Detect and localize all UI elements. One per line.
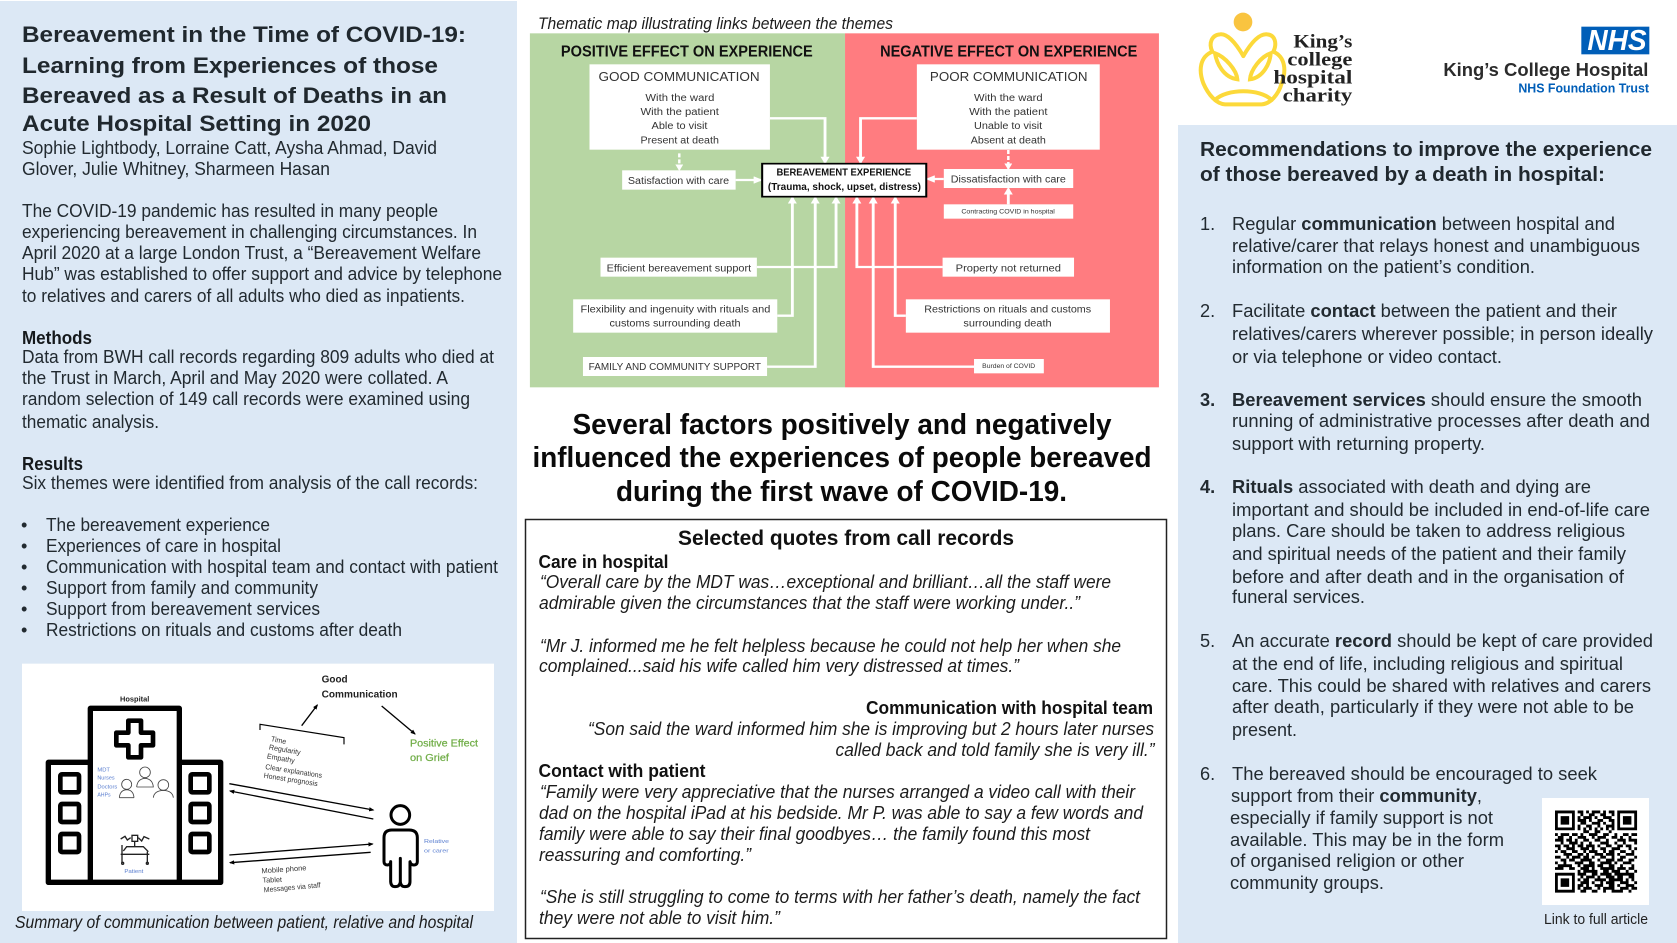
logo: nhs trust: NHS Foundation Trust [1518, 81, 1650, 95]
quotes: care in hospital: Care in hospital [538, 552, 668, 572]
recommendation 2: Facilitate contact between the patient and their [1232, 301, 1617, 321]
relative label: or carer [424, 849, 449, 855]
bracket with communication qualities: Regularity [268, 742, 302, 757]
results heading: Results [22, 454, 83, 474]
quotes: communication with hospital team: called back and told family she is very ill.” [836, 740, 1155, 760]
recommendation 6: The bereaved should be encouraged to seek [1232, 764, 1598, 784]
recommendation 2: or via telephone or video contact. [1232, 347, 1502, 367]
box: good communication: GOOD COMMUNICATION [598, 70, 760, 85]
staff labels: Doctors [97, 784, 117, 790]
box: poor communication: Unable to visit [974, 121, 1043, 132]
box: flexibility: customs surrounding death [609, 318, 741, 329]
box: efficient bereavement support [601, 258, 757, 277]
title: Bereavement in the Time of COVID-19: [22, 22, 466, 47]
box: good communication: With the patient [641, 107, 720, 118]
thematic map caption: Thematic map illustrating links between the themes [538, 15, 893, 33]
staff labels: AHPs [97, 792, 111, 798]
quotes: contact with patient: Contact with patient [538, 761, 706, 781]
quotes: communication with hospital team: “Son said the ward informed him she is improving but 2 hours later nurses [588, 719, 1154, 739]
recommendation 1: relative/carer that relays honest and unambiguous [1232, 236, 1640, 256]
box: property not returned: Property not returned [956, 264, 1061, 274]
themes list: Communication with hospital team and contact with patient [46, 557, 498, 577]
recommendation 5: An accurate record should be kept of care provided [1232, 631, 1653, 651]
staff labels [97, 768, 117, 798]
quotes: communication with hospital team: Communication with hospital team [866, 698, 1153, 718]
methods text: thematic analysis. [22, 412, 159, 432]
bracket with communication qualities [260, 724, 344, 788]
box: poor communication: With the ward [974, 93, 1043, 104]
box: good communication: Able to visit [652, 121, 708, 132]
box: poor communication: POOR COMMUNICATION [930, 70, 1087, 85]
introduction text: The COVID-19 pandemic has resulted in many people [22, 201, 438, 221]
title: Bereaved as a Result of Deaths in an [22, 83, 447, 108]
good communication label: Communication [322, 689, 398, 700]
themes list: Support from family and community [46, 578, 319, 598]
bracket with communication qualities: Empathy [266, 751, 296, 765]
recommendation 3: Bereavement services should ensure the smooth [1232, 390, 1642, 410]
recommendation 3: 3. [1200, 390, 1215, 410]
icon: relative or carer [384, 806, 417, 887]
authors [22, 138, 437, 179]
themes list: • [21, 557, 27, 577]
quotes: contact with patient [538, 761, 1144, 928]
recommendation 2: relatives/carers wherever possible; in person ideally [1232, 324, 1654, 344]
recommendation 4: before and after death and in the organisation of [1232, 567, 1625, 587]
quotes: contact with patient: “Family were very appreciative that the nurses arranged a video call with their [540, 782, 1136, 802]
diagram caption: Summary of communication between patient, relative and hospital [15, 912, 474, 932]
recommendation 6: of organised religion or other [1230, 851, 1464, 871]
positive effect label [410, 738, 478, 764]
box: efficient bereavement support: Efficient bereavement support [607, 264, 752, 274]
central finding heading [532, 409, 1152, 508]
introduction text [22, 201, 502, 306]
relative label [424, 839, 449, 855]
arrows: links to bereavement experience [679, 118, 1008, 367]
recommendation 5 [1200, 631, 1653, 740]
quotes: care in hospital: complained...said his wife called him very distressed at times.” [539, 656, 1020, 676]
box: burden of covid [974, 359, 1044, 373]
icon: staff [119, 767, 173, 798]
arrows: upper two-way communication [229, 784, 373, 819]
themes list: The bereavement experience [46, 515, 270, 535]
themes list [21, 515, 498, 640]
positive effect label: Positive Effect [410, 738, 478, 749]
patient label: Patient [124, 869, 144, 875]
qr code [1542, 798, 1649, 905]
panel: study summary [0, 1, 517, 943]
recommendation 2: 2. [1200, 301, 1215, 321]
central finding heading: during the first wave of COVID-19. [616, 476, 1067, 508]
recommendation 4: and spiritual needs of the patient and their family [1232, 544, 1627, 564]
box: dissatisfaction with care: Dissatisfaction with care [951, 175, 1066, 185]
box: restrictions: surrounding death [963, 318, 1052, 329]
themes list: • [21, 536, 27, 556]
themes list: • [21, 599, 27, 619]
themes list: Support from bereavement services [46, 599, 320, 619]
themes list: • [21, 620, 27, 640]
quotes: contact with patient: family were able to say their final goodbyes… the family found this most [539, 824, 1091, 844]
quotes: care in hospital: admirable given the circumstances that the staff were working under..” [539, 593, 1081, 613]
positive effect label: on Grief [410, 753, 449, 764]
devices list [261, 863, 322, 894]
communication diagram [22, 664, 494, 911]
introduction text: April 2020 at a large London Trust, a “Bereavement Welfare [22, 243, 481, 263]
box: satisfaction with care [622, 170, 736, 190]
recommendation 6: 6. [1200, 764, 1215, 784]
panel: selected quotes [526, 520, 1166, 938]
recommendation 4: 4. [1200, 477, 1215, 497]
logo: king's college hospital charity: college [1287, 49, 1352, 70]
recommendation 2 [1200, 301, 1654, 367]
box: bereavement experience: BEREAVEMENT EXPERIENCE [776, 168, 911, 178]
box: bereavement experience [762, 164, 926, 197]
results text: Six themes were identified from analysis of the call records: [22, 473, 478, 493]
methods text: random selection of 149 call records were examined using [22, 389, 470, 409]
recommendation 4 [1200, 477, 1650, 607]
devices list: Tablet [262, 875, 282, 885]
recommendation 4: important and should be included in end-of-life care [1232, 500, 1650, 520]
themes list: • [21, 515, 27, 535]
box: restrictions [906, 299, 1110, 333]
title: Acute Hospital Setting in 2020 [22, 111, 371, 136]
authors: Glover, Julie Whitney, Sharmeen Hasan [22, 159, 330, 179]
panel: positive effect [530, 33, 845, 387]
methods text: Data from BWH call records regarding 809 adults who died at [22, 347, 494, 367]
icon: hospital building: Hospital [120, 695, 149, 704]
introduction text: to relatives and carers of all adults who died as inpatients. [22, 286, 465, 306]
good communication label [322, 674, 398, 700]
box: poor communication: Absent at death [971, 136, 1046, 146]
logo: nhs trust: NHS [1587, 25, 1647, 57]
box: family and community support: FAMILY AND COMMUNITY SUPPORT [589, 362, 761, 373]
arrow: to good communication [302, 705, 317, 726]
quotes: contact with patient: they were not able to visit him.” [539, 908, 781, 928]
heading: positive effect: POSITIVE EFFECT ON EXPERIENCE [561, 42, 813, 60]
introduction text: Hub” was established to offer support and advice by telephone [22, 264, 502, 284]
recommendation 5: 5. [1200, 631, 1215, 651]
recommendation 3: support with returning property. [1232, 434, 1485, 454]
methods text: the Trust in March, April and May 2020 were collated. A [22, 368, 449, 388]
title [22, 22, 466, 136]
panel: negative effect [845, 33, 1159, 387]
recommendation 4: funeral services. [1232, 587, 1365, 607]
themes list: • [21, 578, 27, 598]
recommendation 1: 1. [1200, 214, 1215, 234]
central finding heading: Several factors positively and negatively [572, 409, 1112, 441]
recommendation 4: Rituals associated with death and dying are [1232, 477, 1591, 497]
logo: nhs trust: King’s College Hospital [1443, 59, 1648, 80]
recommendation 3 [1200, 390, 1650, 454]
logo: king's college hospital charity: hospital [1273, 67, 1352, 88]
staff labels: MDT [97, 768, 111, 774]
recommendation 4: plans. Care should be taken to address religious [1232, 521, 1625, 541]
box: contracting covid [944, 204, 1073, 219]
title: Learning from Experiences of those [22, 53, 438, 78]
recommendation 1: Regular communication between hospital and [1232, 214, 1615, 234]
box: property not returned [943, 258, 1074, 277]
recommendations heading [1200, 138, 1652, 186]
relative label: Relative [424, 839, 449, 845]
themes list: Experiences of care in hospital [46, 536, 281, 556]
box: burden of covid: Burden of COVID [982, 364, 1035, 370]
recommendation 5: at the end of life, including religious and spiritual [1232, 654, 1623, 674]
panel: recommendations [1178, 125, 1677, 943]
box: poor communication [917, 64, 1100, 150]
quotes: contact with patient: reassuring and comforting.” [539, 845, 752, 865]
box: good communication: Present at death [641, 136, 719, 146]
bracket with communication qualities: Clear explanations [265, 762, 323, 780]
qr caption: Link to full article [1544, 911, 1648, 928]
quotes: care in hospital [538, 552, 1121, 676]
quotes: communication with hospital team [588, 698, 1155, 760]
recommendations heading: of those bereaved by a death in hospital: [1200, 163, 1605, 186]
recommendation 1: information on the patient’s condition. [1232, 257, 1535, 277]
recommendation 6 [1200, 764, 1598, 893]
arrow: to positive effect [382, 706, 415, 734]
good communication label: Good [322, 674, 348, 685]
arrows: lower two-way communication [229, 844, 373, 863]
logo: nhs trust [1443, 25, 1650, 95]
thematic map [530, 33, 1159, 387]
box: dissatisfaction with care [944, 169, 1073, 188]
box: good communication [589, 64, 770, 150]
quotes: care in hospital: “Mr J. informed me he felt helpless because he could not help her when she [540, 636, 1121, 656]
box: restrictions: Restrictions on rituals and customs [924, 304, 1092, 315]
recommendation 5: present. [1232, 720, 1297, 740]
bracket with communication qualities: Honest prognosis [263, 771, 319, 788]
recommendation 5: care. This could be shared with relatives and carers [1232, 676, 1651, 696]
quotes: contact with patient: “She is still struggling to come to terms with her father’s death, namely the fact [540, 887, 1141, 907]
recommendation 6: especially if family support is not [1230, 808, 1493, 828]
themes list: Restrictions on rituals and customs after death [46, 620, 402, 640]
methods heading: Methods [22, 328, 92, 348]
quotes heading: Selected quotes from call records [678, 527, 1014, 550]
authors: Sophie Lightbody, Lorraine Catt, Aysha Ahmad, David [22, 138, 437, 158]
recommendation 5: after death, particularly if they were not able to be [1232, 697, 1634, 717]
introduction text: experiencing bereavement in challenging circumstances. In [22, 222, 477, 242]
box: satisfaction with care: Satisfaction with care [628, 176, 729, 187]
recommendation 1 [1200, 214, 1640, 277]
logo: king's college hospital charity: King’s [1293, 32, 1352, 53]
icon: hospital building [48, 695, 221, 882]
devices list: Mobile phone [261, 863, 307, 875]
central finding heading: influenced the experiences of people bereaved [532, 442, 1152, 474]
methods text [22, 347, 494, 432]
box: contracting covid: Contracting COVID in hospital [961, 207, 1055, 215]
logo: king's college hospital charity [1201, 13, 1650, 107]
recommendation 3: running of administrative processes after death and [1232, 411, 1650, 431]
recommendations heading: Recommendations to improve the experience [1200, 138, 1652, 161]
box: flexibility: Flexibility and ingenuity with rituals and [581, 304, 770, 315]
box: family and community support [583, 357, 767, 376]
box: flexibility [573, 299, 777, 333]
box: bereavement experience: (Trauma, shock, upset, distress) [768, 182, 921, 193]
recommendation 6: community groups. [1230, 873, 1384, 893]
heading: negative effect: NEGATIVE EFFECT ON EXPERIENCE [880, 42, 1137, 60]
recommendation 6: support from their community, [1231, 786, 1482, 806]
recommendation 6: available. This may be in the form [1230, 830, 1504, 850]
icon: patient bed [121, 835, 149, 864]
logo: king's college hospital charity: charity [1283, 86, 1353, 107]
devices list: Messages via staff [263, 880, 322, 894]
quotes: contact with patient: dad on the hospital iPad at his bedside. Mr P. was able to say a few words and [539, 803, 1144, 823]
bracket with communication qualities: Time [270, 734, 287, 746]
staff labels: Nurses [97, 776, 115, 782]
box: poor communication: With the patient [969, 107, 1048, 118]
box: good communication: With the ward [645, 93, 714, 104]
quotes: care in hospital: “Overall care by the MDT was…exceptional and brilliant…all the staff were [540, 572, 1111, 592]
